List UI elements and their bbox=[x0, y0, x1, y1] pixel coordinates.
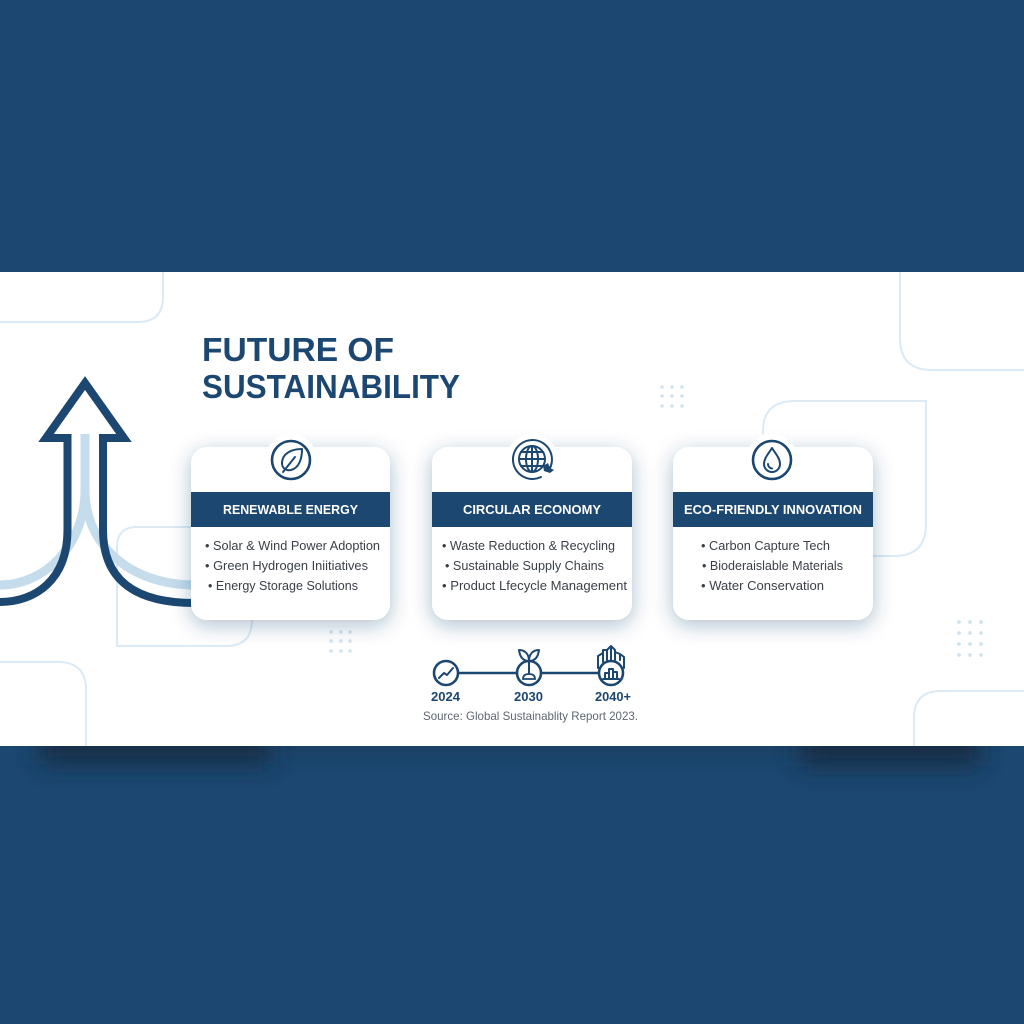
list: eco-friendly innovation: • Bioderaislable Materials bbox=[702, 558, 843, 573]
icon: seedling 2030 bbox=[517, 650, 541, 685]
timeline years: 2030 bbox=[514, 689, 543, 704]
header: renewable energy: RENEWABLE ENERGY bbox=[223, 502, 358, 517]
list: circular economy bbox=[442, 538, 627, 593]
header: circular economy bbox=[432, 492, 632, 527]
list: circular economy: • Sustainable Supply Chains bbox=[445, 558, 604, 573]
list: renewable energy: • Solar & Wind Power Adoption bbox=[205, 538, 380, 553]
list: renewable energy: • Green Hydrogen Iniitiatives bbox=[205, 558, 368, 573]
list: renewable energy bbox=[205, 538, 380, 593]
title bbox=[202, 332, 460, 406]
panel: eco-friendly innovation bbox=[673, 434, 873, 620]
list: eco-friendly innovation: • Carbon Capture Tech bbox=[701, 538, 830, 553]
header: renewable energy bbox=[191, 492, 390, 527]
timeline years: 2024 bbox=[431, 689, 461, 704]
panel: renewable energy bbox=[191, 434, 390, 620]
list: eco-friendly innovation bbox=[701, 538, 843, 593]
decorative dot grids bbox=[329, 385, 983, 657]
list: circular economy: • Product Lfecycle Management bbox=[442, 578, 627, 593]
decorative outlines bbox=[0, 272, 1024, 746]
header: eco-friendly innovation: ECO-FRIENDLY INNOVATION bbox=[684, 502, 862, 517]
band shadow bbox=[29, 746, 991, 777]
title: FUTURE OF bbox=[202, 332, 394, 369]
icon: growth chart 2024 bbox=[434, 661, 458, 685]
list: eco-friendly innovation: • Water Conservation bbox=[701, 578, 824, 593]
icon: city 2040 bbox=[598, 646, 624, 685]
source note: Source: Global Sustainablity Report 2023. bbox=[423, 709, 638, 723]
timeline bbox=[431, 646, 631, 704]
header: eco-friendly innovation bbox=[673, 492, 873, 527]
title: SUSTAINABILITY bbox=[202, 369, 460, 406]
icon: leaf bbox=[272, 441, 310, 479]
panel: circular economy bbox=[432, 434, 632, 620]
icon: water drop bbox=[753, 441, 791, 479]
icon: globe bbox=[513, 440, 554, 479]
list: renewable energy: • Energy Storage Solutions bbox=[208, 578, 358, 593]
timeline years: 2040+ bbox=[595, 689, 631, 704]
list: circular economy: • Waste Reduction & Recycling bbox=[442, 538, 615, 553]
timeline years bbox=[431, 689, 631, 704]
growth arrow bbox=[0, 383, 195, 603]
white content band bbox=[0, 272, 1024, 746]
header: circular economy: CIRCULAR ECONOMY bbox=[463, 502, 601, 517]
